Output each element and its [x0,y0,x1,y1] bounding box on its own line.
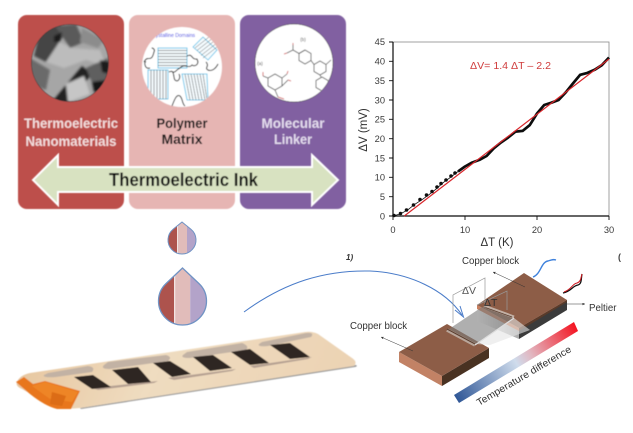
label: molecular linker [262,115,325,147]
y axis tick labels: 30 [375,95,385,105]
label: peltier: Peltier [589,303,617,314]
diagram: polymer crystalline domains: Crystalline Domains [151,33,195,39]
label: thermoelectric nanomaterials [24,115,118,149]
y axis tick labels: 5 [380,192,385,202]
photo: nanomaterials micrograph [31,24,109,102]
orange connector tape [16,377,80,409]
series: measured data [392,58,609,217]
diagram: molecular linker structures: (a) [257,61,263,66]
x axis tick labels [390,225,614,235]
diagram: molecular linker structures: (b) [300,37,306,42]
panel: molecular linker [240,15,346,209]
y axis tick labels: 10 [375,172,385,182]
series: linear fit [404,59,609,216]
gradient bar: temperature difference [454,322,578,403]
y axis tick labels [375,37,385,221]
x axis tick labels: 0 [390,225,396,235]
x axis title: ΔT (K) [480,237,514,249]
icon: small ink drop [168,222,196,254]
plot frame [389,42,609,220]
x axis tick labels: 20 [532,225,542,235]
label: copper block left: Copper block [350,321,407,332]
fit equation: ΔV= 1.4 ΔT – 2.2 [470,60,551,72]
chart: voltage vs temperature difference [358,37,614,249]
arrow: curved blue pointer to device [244,271,464,317]
diagram: molecular linker structures [257,37,331,99]
arrow: thermoelectric ink: Thermoelectric Ink [109,170,259,190]
label: temperature difference: Temperature difference [475,344,574,409]
label: delta V: ΔV [462,285,476,297]
thermoelectric legs [74,343,310,389]
back copper block on peltier [477,273,567,339]
label: copper block top: Copper block [462,256,519,267]
contact pads [44,333,312,390]
diagram: seebeck measurement setup [350,256,617,409]
glass film sample [447,306,530,345]
y axis tick labels: 35 [375,76,385,86]
y axis tick labels: 40 [375,56,385,66]
label: thermoelectric nanomaterials: Nanomaterials [26,133,117,149]
wires [533,260,582,293]
label: polymer matrix: Polymer [156,115,208,131]
front copper block [399,324,489,386]
diagram: polymer crystalline domains [144,33,218,106]
y axis title: ΔV (mV) [358,108,370,152]
x axis tick labels: 10 [460,225,470,235]
label: polymer matrix: Matrix [162,131,203,147]
printed thermoelectric device on flexible slide [16,332,357,409]
icon: large ink drop [156,266,208,328]
label: thermoelectric nanomaterials: Thermoelectric [24,115,118,131]
label: molecular linker: Molecular [262,115,325,131]
leader lines [381,272,585,351]
stray cropped label: 1) [346,253,353,262]
y axis tick labels: 20 [375,134,385,144]
label: polymer matrix [156,115,208,147]
label: delta T: ΔT [484,297,498,309]
y axis tick labels: 25 [375,114,385,124]
y axis tick labels: 15 [375,153,385,163]
y axis tick labels: 0 [380,211,385,221]
label: molecular linker: Linker [274,131,312,147]
arrow: thermoelectric ink [33,155,338,205]
measurement brackets [453,278,507,323]
panel: thermoelectric nanomaterials [18,15,124,209]
stray cropped mark: ( [618,252,621,262]
x axis tick labels: 30 [604,225,614,235]
y axis tick labels: 45 [375,37,385,47]
panel: polymer matrix [129,15,235,209]
